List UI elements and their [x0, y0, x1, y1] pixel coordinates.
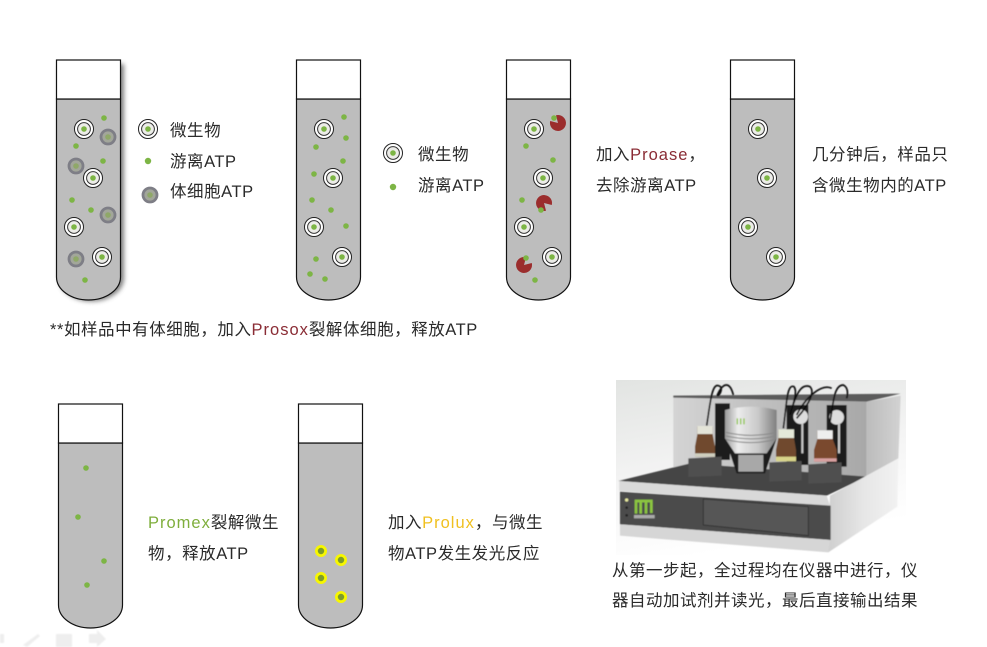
caption: after several minutes: 含微生物内的ATP — [812, 177, 947, 195]
caption: automated instrument process: 从第一步起，全过程均在仪器中进行，仪 — [612, 557, 918, 581]
faint slide toolbar icons — [0, 630, 106, 647]
caption: Promex step: Promex裂解微生 — [148, 514, 279, 532]
legend label: free ATP: 游离ATP — [170, 153, 237, 171]
legend icons for tube 1 — [138, 120, 158, 202]
legend label: microbes, tube 2: 微生物 — [418, 146, 469, 164]
caption: Proase step: 去除游离ATP — [596, 177, 697, 195]
instrument photo — [616, 380, 906, 555]
tube 1: sample with microbes, free ATP and somatic cells — [56, 60, 124, 301]
legend label: free ATP, tube 2: 游离ATP — [418, 177, 485, 195]
caption: after several minutes — [812, 141, 948, 195]
tube 5: released microbial ATP — [58, 404, 122, 628]
caption: automated instrument process — [612, 557, 918, 611]
tube 2: sample with microbes and free ATP — [296, 60, 360, 300]
legend icons for tube 2 — [384, 144, 402, 190]
caption: Promex step: 物，释放ATP — [148, 540, 249, 564]
tube 3: Proase enzymes removing free ATP — [506, 60, 570, 300]
legend label: somatic cell ATP: 体细胞ATP — [170, 183, 254, 201]
caption: Proase step — [596, 141, 705, 195]
caption: Prolux step — [388, 509, 543, 563]
caption: after several minutes: 几分钟后，样品只 — [812, 141, 948, 165]
caption: Prolux step: 物ATP发生发光反应 — [388, 545, 540, 563]
legend label: microbes: 微生物 — [170, 122, 221, 140]
tube 6: glowing ATP reaction — [298, 404, 362, 628]
tube 4: microbes only — [730, 60, 794, 300]
caption: Proase step: 加入Proase， — [596, 141, 705, 165]
caption: Prolux step: 加入Prolux，与微生 — [388, 509, 543, 533]
caption: Promex step — [148, 514, 279, 564]
caption: automated instrument process: 器自动加试剂并读光，最后直接输出结果 — [612, 587, 918, 611]
note: Prosox lyses somatic cells: **如样品中有体细胞，加入Prosox裂解体细胞，释放ATP — [50, 316, 478, 340]
